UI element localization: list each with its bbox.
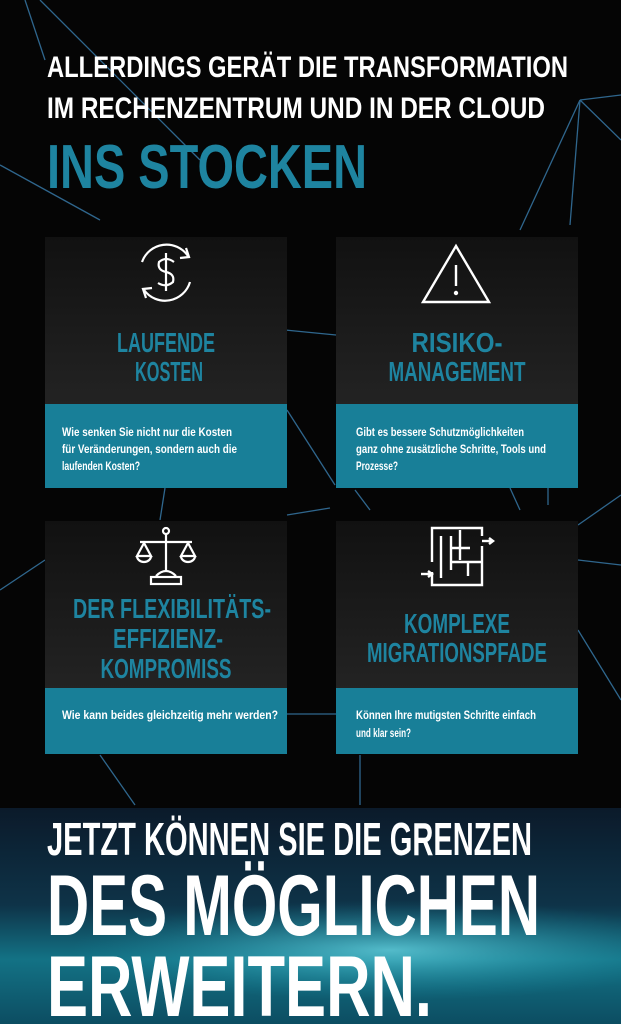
panel: laufende kosten (45, 237, 287, 488)
icon: dollar cycle (142, 245, 190, 301)
icon: scale (137, 528, 195, 584)
panel: laufende kosten: KOSTEN (135, 356, 203, 387)
panel: risiko-management: RISIKO- (412, 327, 502, 358)
panel: risiko-management: MANAGEMENT (388, 356, 526, 387)
title (47, 51, 568, 202)
panel: migrationspfade (336, 521, 578, 754)
panel: flexibilitaet: Wie kann beides gleichzeitig mehr werden? (62, 710, 278, 722)
panel: laufende kosten: für Veränderungen, sondern auch die (62, 444, 237, 456)
panel: flexibilitaet: EFFIZIENZ- (113, 623, 223, 654)
panel: risiko-management: Gibt es bessere Schutzmöglichkeiten (356, 427, 524, 439)
panel: risiko-management: ganz ohne zusätzliche Schritte, Tools und (356, 444, 546, 456)
panel: laufende kosten: laufenden Kosten? (62, 461, 140, 473)
panel: migrationspfade: Können Ihre mutigsten Schritte einfach (356, 710, 536, 722)
panel: flexibilitaet (45, 521, 287, 754)
panel: laufende kosten: LAUFENDE (117, 327, 215, 358)
panel: migrationspfade: und klar sein? (356, 728, 411, 740)
panel: risiko-management (336, 237, 578, 488)
icon: maze (421, 528, 493, 585)
panel: laufende kosten: Wie senken Sie nicht nur die Kosten (62, 427, 232, 439)
panel: flexibilitaet: DER FLEXIBILITÄTS- (73, 593, 271, 624)
title: INS STOCKEN (47, 133, 367, 202)
panel: risiko-management: Prozesse? (356, 461, 398, 473)
panel: migrationspfade: KOMPLEXE (404, 608, 510, 639)
icon: warning (423, 246, 489, 302)
panel: flexibilitaet: KOMPROMISS (100, 653, 232, 684)
bottom banner (0, 808, 621, 1024)
heading: closing statement (47, 813, 540, 1024)
